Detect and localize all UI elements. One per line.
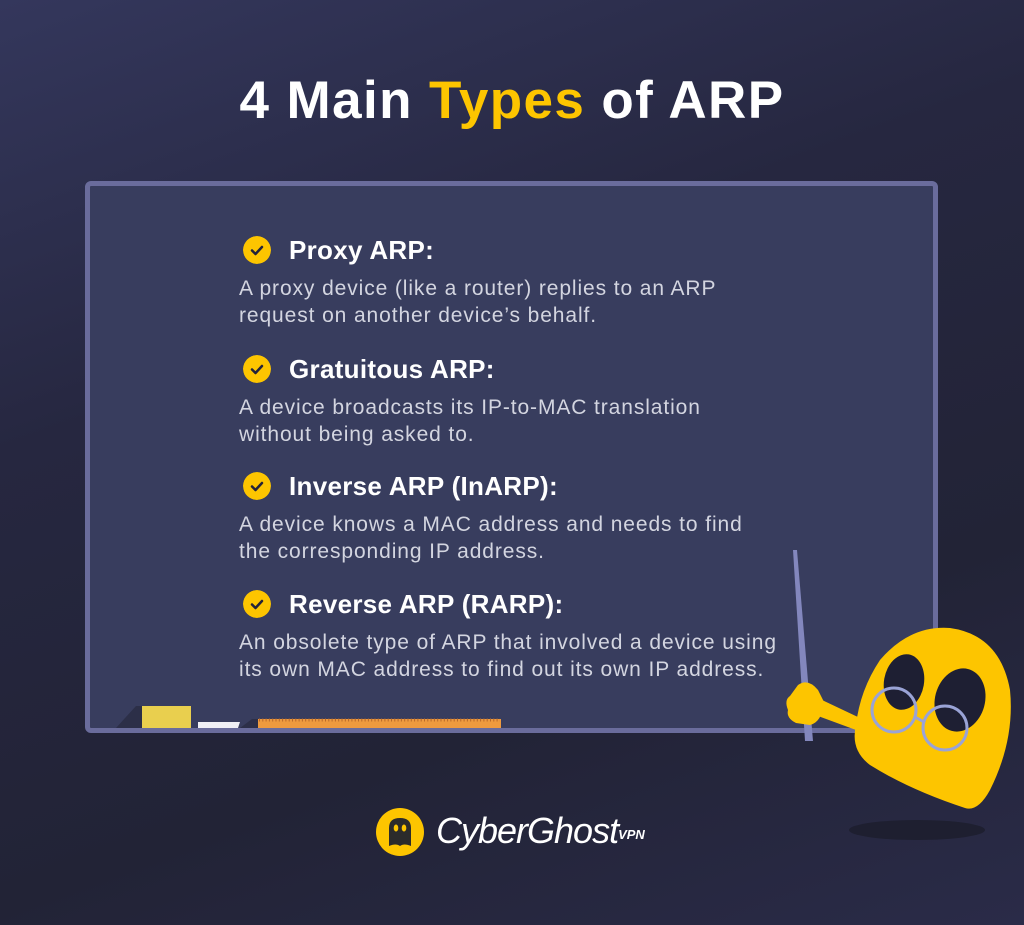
panel: chalkboard — [85, 181, 938, 733]
body — [855, 628, 1011, 809]
item: reverse ARP: its own MAC address to find out its own IP address. — [239, 658, 764, 681]
item: inverse ARP: the corresponding IP address. — [239, 540, 545, 563]
item: inverse ARP: Inverse ARP (InARP): — [289, 471, 558, 501]
item: inverse ARP — [239, 471, 743, 563]
hand — [786, 682, 824, 725]
arm — [818, 700, 860, 730]
item: reverse ARP: Reverse ARP (RARP): — [289, 589, 563, 619]
item: proxy ARP — [239, 235, 716, 327]
text: CyberGhostVPN — [436, 810, 645, 851]
item: gratuitous ARP: Gratuitous ARP: — [289, 354, 495, 384]
eyes — [879, 651, 929, 713]
item: reverse ARP: An obsolete type of ARP that involved a device using — [239, 631, 777, 654]
logo: CyberGhost VPN — [376, 808, 645, 856]
item: gratuitous ARP: without being asked to. — [239, 423, 475, 446]
item: reverse ARP — [239, 589, 777, 681]
glasses — [872, 688, 916, 732]
ghost mascot with pointer — [786, 550, 1011, 840]
shadow — [849, 820, 985, 840]
item: proxy ARP: Proxy ARP: — [289, 235, 434, 265]
title: 4 Main Types of ARP — [240, 71, 784, 130]
pointer stick — [793, 550, 813, 741]
item: gratuitous ARP — [239, 354, 701, 446]
item: proxy ARP: request on another device’s behalf. — [239, 304, 597, 327]
item: inverse ARP: A device knows a MAC address and needs to find — [239, 513, 743, 536]
item: proxy ARP: A proxy device (like a router) replies to an ARP — [239, 277, 716, 300]
item: gratuitous ARP: A device broadcasts its IP-to-MAC translation — [239, 396, 701, 419]
